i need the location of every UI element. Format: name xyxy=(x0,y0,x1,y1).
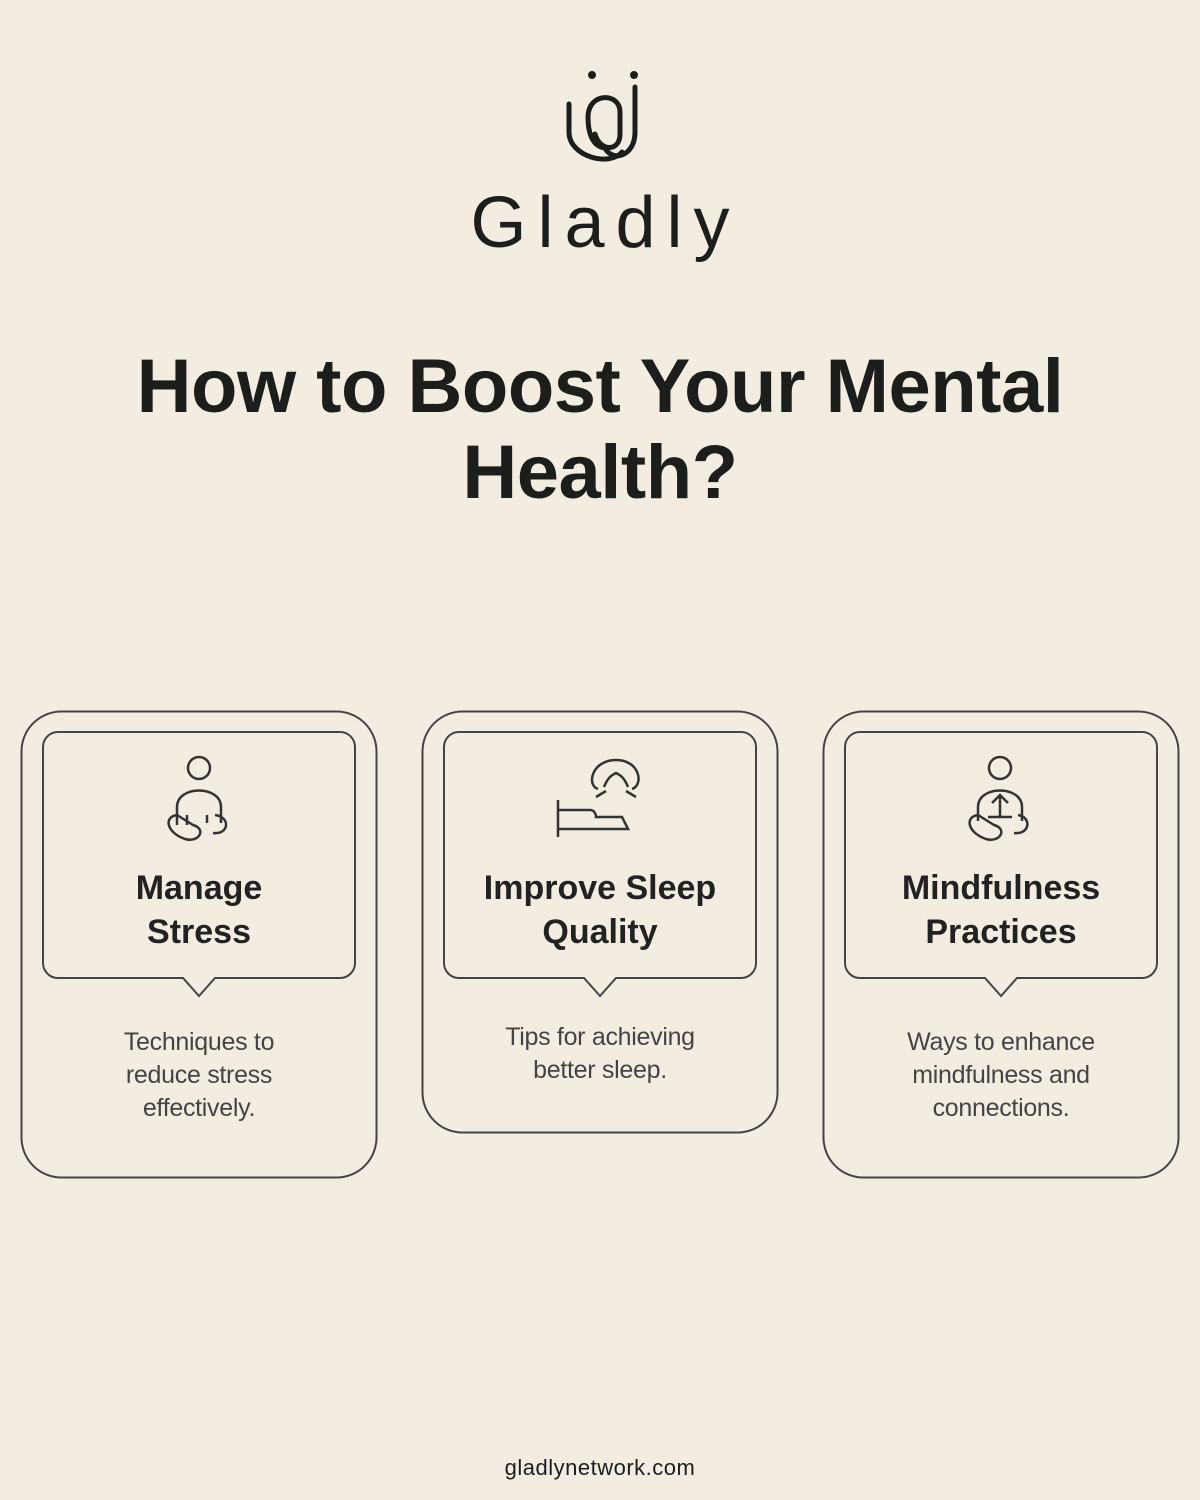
heading: Mindfulness xyxy=(902,869,1100,907)
icon: mindful person xyxy=(968,756,1029,841)
icon: meditating person xyxy=(167,756,228,841)
text: better sleep. xyxy=(533,1056,667,1084)
card: improve sleep xyxy=(422,710,778,1134)
heading: Improve Sleep xyxy=(484,869,716,907)
text: mindfulness and xyxy=(912,1061,1090,1089)
text xyxy=(505,1023,695,1084)
text: Ways to enhance xyxy=(907,1028,1095,1056)
text xyxy=(907,1028,1095,1122)
title: How to Boost Your Mental xyxy=(137,344,1063,429)
text xyxy=(124,1028,274,1122)
text: connections. xyxy=(933,1094,1069,1122)
heading: Stress xyxy=(147,913,251,951)
card: manage stress xyxy=(20,710,378,1178)
card: mindfulness xyxy=(822,710,1180,1178)
heading xyxy=(136,869,262,951)
heading: Practices xyxy=(925,913,1077,951)
brand name: Gladly xyxy=(470,183,741,263)
footer url: gladlynetwork.com xyxy=(505,1455,695,1480)
title: Health? xyxy=(462,430,738,515)
heading: Manage xyxy=(136,869,262,907)
text: Tips for achieving xyxy=(505,1023,695,1051)
text: reduce stress xyxy=(126,1061,272,1089)
title xyxy=(137,344,1063,515)
text: effectively. xyxy=(143,1094,255,1122)
logo icon xyxy=(566,71,638,162)
text: Techniques to xyxy=(124,1028,274,1056)
heading xyxy=(902,869,1100,951)
heading xyxy=(484,869,716,951)
heading: Quality xyxy=(542,913,658,951)
icon: sleeping person xyxy=(556,758,640,837)
